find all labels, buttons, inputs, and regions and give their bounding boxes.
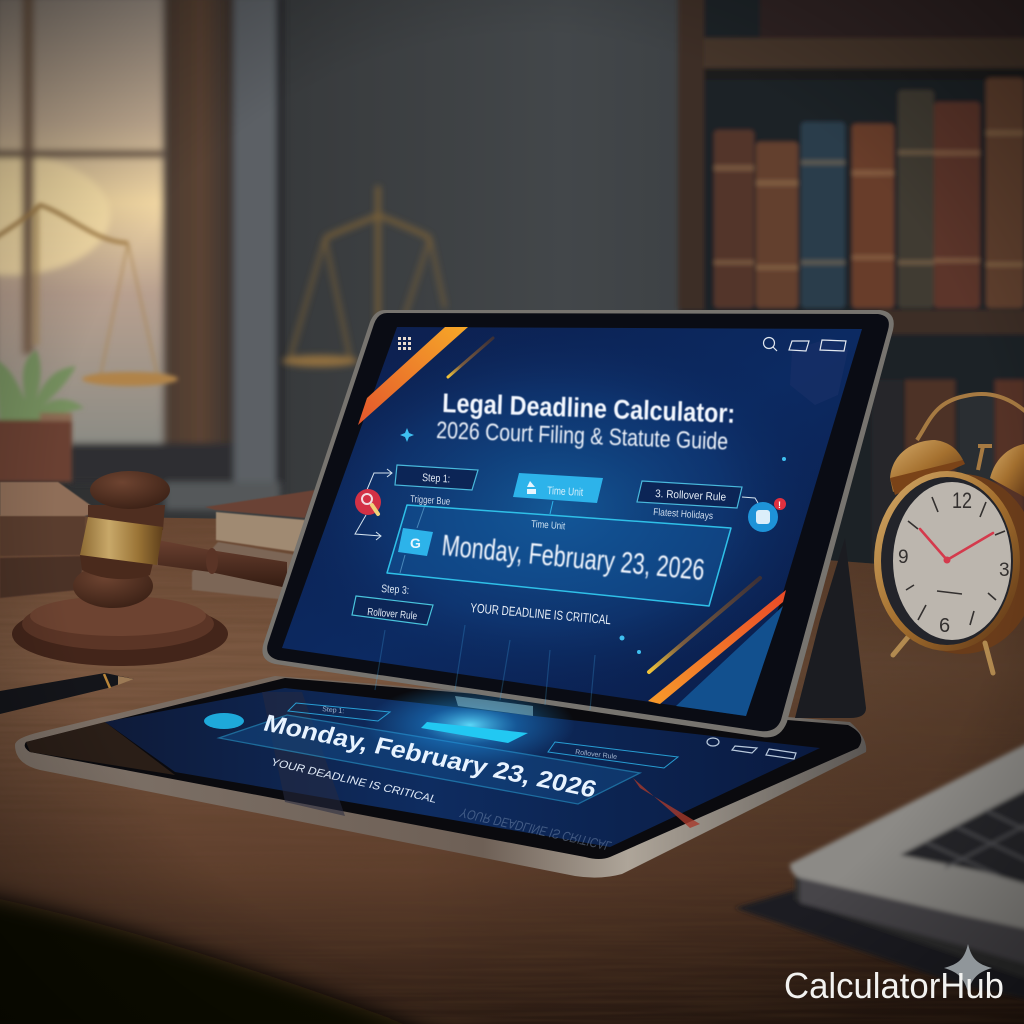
top right toolbar icons: [764, 338, 846, 351]
lower tablet lying on desk: [15, 676, 866, 878]
connectors: [355, 469, 758, 573]
holidays label: Flatest Holidays: [653, 507, 713, 522]
upper tablet: [262, 310, 894, 737]
red magnifier badge: [355, 489, 381, 515]
blue calendar badge: [748, 498, 786, 532]
clock bells and handle: [890, 394, 1024, 500]
trigger date label: Trigger Bue: [410, 494, 451, 508]
calendar icon tile: [398, 528, 433, 556]
tablet screen: [282, 327, 862, 716]
lower tablet deadline text: YOUR DEADLINE IS CRITICAL: [269, 757, 439, 806]
clock numerals: 9: [898, 547, 909, 568]
logo wordmark: CalculatorHub: [784, 965, 1004, 1006]
time unit caption: Time Unit: [531, 519, 566, 532]
clock ticks: [906, 497, 1005, 625]
tablet stand: [795, 538, 866, 718]
step 1 box: [395, 465, 478, 490]
decorative stripes top left: [358, 327, 493, 425]
time unit button: [513, 473, 603, 503]
lower tablet step labels: [322, 706, 617, 761]
sparkles: [400, 428, 786, 654]
clock numerals: 12: [952, 488, 972, 513]
light rays: [375, 625, 595, 710]
clock numerals: 6: [939, 615, 950, 637]
clock hands: [920, 529, 993, 564]
date panel: [387, 505, 731, 606]
bookshelf: [678, 0, 1024, 595]
step 1 box: Step 1:: [422, 472, 450, 485]
clock body: [886, 474, 1024, 654]
rollover rule small box: Rollover Rule: [367, 606, 418, 622]
title line 1: Legal Deadline Calculator:: [442, 388, 736, 429]
top left menu icon: [398, 337, 411, 350]
window with sunset: [0, 0, 284, 510]
stacked books left: [0, 482, 100, 598]
plant and pot: [0, 350, 84, 482]
step 3 label: Step 3:: [381, 583, 410, 597]
tablet body: [262, 310, 894, 737]
decorative stripes bottom right: [648, 578, 786, 716]
pen: [0, 673, 134, 714]
projection light under tablet: [455, 696, 533, 716]
back wall: [0, 0, 1024, 600]
gavel brass band: [80, 517, 163, 565]
lower tablet step labels: Rollover Rule: [575, 749, 617, 761]
blue calendar badge: !: [778, 500, 781, 510]
lower tablet highlighted button: [421, 722, 528, 743]
time unit button: Time Unit: [547, 485, 583, 499]
clock face: [893, 482, 1011, 640]
wooden desk: [0, 515, 1024, 1024]
keyboard keys: [900, 788, 1024, 885]
lower tablet date text: Monday, February 23, 2026: [260, 710, 600, 803]
lower tablet reflected text: YOUR DEADLINE IS CRITICAL: [458, 805, 614, 853]
lower tablet screen: [105, 688, 820, 847]
blurred scale on the window: [0, 205, 178, 386]
rollover rule box: 3. Rollover Rule: [655, 488, 726, 504]
lower tablet blue badge: [204, 713, 244, 729]
rollover rule small box: [352, 596, 433, 625]
lower tablet step boxes: [288, 703, 678, 768]
title line 2: 2026 Court Filing & Statute Guide: [436, 417, 729, 456]
keyboard: [735, 742, 1024, 1000]
gavel: [12, 471, 287, 666]
dotted hexagon corner: [790, 338, 848, 405]
calendar icon glyph: G: [410, 535, 421, 551]
lower tablet step labels: Step 1:: [322, 706, 345, 715]
brand logo: [784, 944, 1004, 1006]
gavel handle: [158, 540, 287, 588]
rollover rule box: [637, 481, 742, 508]
lower tablet glow: [365, 683, 575, 767]
deadline date: Monday, February 23, 2026: [440, 529, 706, 587]
lower tablet date panel: [219, 715, 640, 804]
gavel base: [12, 602, 228, 666]
deadline critical caption: YOUR DEADLINE IS CRITICAL: [470, 600, 612, 627]
logo star: [944, 944, 992, 992]
background scale behind tablet: [282, 186, 445, 367]
clock numerals: [898, 488, 1010, 637]
clock: [874, 394, 1024, 673]
gavel head: [73, 564, 153, 608]
clock numerals: 3: [999, 560, 1010, 581]
lower tablet toolbar icons: [707, 738, 796, 759]
stacked books right: [192, 490, 315, 600]
